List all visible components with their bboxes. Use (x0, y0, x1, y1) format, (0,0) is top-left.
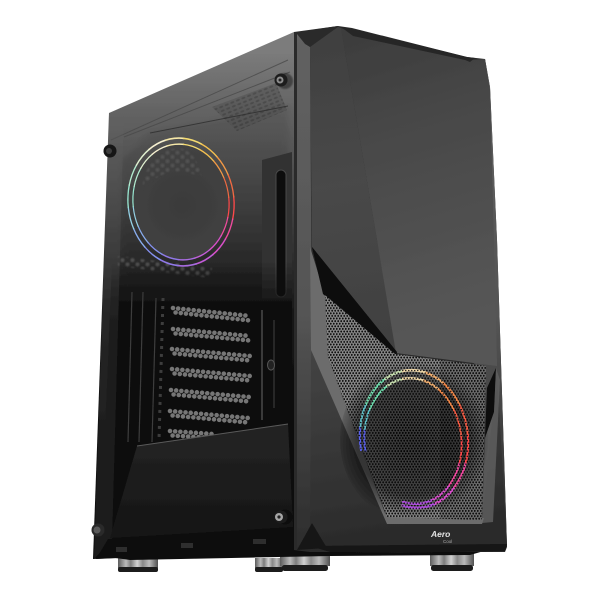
foot: front left (280, 547, 330, 571)
rear RGB ring: outer (122, 133, 240, 271)
foot: front right (430, 550, 474, 571)
thumbscrew: bottom left (92, 524, 104, 536)
bottom edge (310, 544, 507, 553)
slot 4 (172, 369, 250, 380)
underside shadow (100, 545, 505, 560)
right side rim (470, 59, 507, 548)
silver mesh frame (310, 247, 484, 524)
thumbscrew: top right (274, 73, 293, 89)
thumbscrew: bottom right (274, 510, 292, 524)
black wedge (312, 247, 397, 356)
front silhouette base (294, 26, 507, 552)
front RGB ring (358, 368, 470, 510)
outer ring (358, 368, 470, 510)
upper left facet (310, 27, 397, 352)
glass edge (294, 32, 298, 550)
cable hole (276, 170, 286, 297)
vertical front strip (297, 34, 312, 550)
product illustration: PC case (92, 26, 507, 572)
upper main plate (341, 28, 497, 366)
interior rails (111, 60, 290, 140)
top chamfer (341, 27, 475, 62)
interior top shadow (122, 106, 290, 280)
logo sublabel: Cool (443, 539, 452, 544)
foot: rear middle (255, 558, 283, 572)
slot: middle (181, 543, 193, 548)
slot 5 (171, 390, 249, 402)
slot 3 (172, 349, 250, 360)
bottom rail (96, 527, 295, 559)
top vent (212, 83, 287, 131)
slot screws column (159, 298, 163, 440)
rear fan body (127, 139, 235, 265)
corner facet (297, 523, 327, 550)
foot: rear left (118, 556, 158, 572)
rear RGB ring: inner (127, 139, 235, 265)
tray details (262, 310, 274, 420)
panel: front body (294, 26, 507, 553)
top left facet (298, 26, 338, 47)
slot: left (116, 547, 127, 552)
logo: Aero (430, 529, 450, 539)
right wedge (485, 368, 496, 438)
left light band (94, 113, 124, 559)
mesh panel (325, 295, 486, 520)
right mesh shade (440, 360, 486, 520)
inner ring (363, 377, 463, 505)
left rails (128, 292, 156, 442)
PSU shroud (110, 424, 293, 538)
front fan shade (340, 358, 488, 522)
cable panel (262, 152, 292, 300)
slot 1 (173, 308, 250, 320)
panel: glass side (93, 32, 296, 559)
slot: right (253, 539, 266, 544)
rear fan honeycomb (142, 148, 202, 190)
case (92, 26, 507, 572)
hex strip under fan (118, 256, 212, 278)
expansion slot brackets (170, 308, 250, 438)
shroud highlight (137, 424, 288, 446)
right lit rim (482, 368, 500, 523)
motherboard tray, dark lower interior (104, 262, 292, 450)
thumbscrew: top left (104, 144, 116, 158)
slot 7 (170, 431, 212, 438)
slot 6 (170, 411, 248, 422)
lower left body (310, 350, 507, 548)
slot 2 (173, 329, 250, 340)
